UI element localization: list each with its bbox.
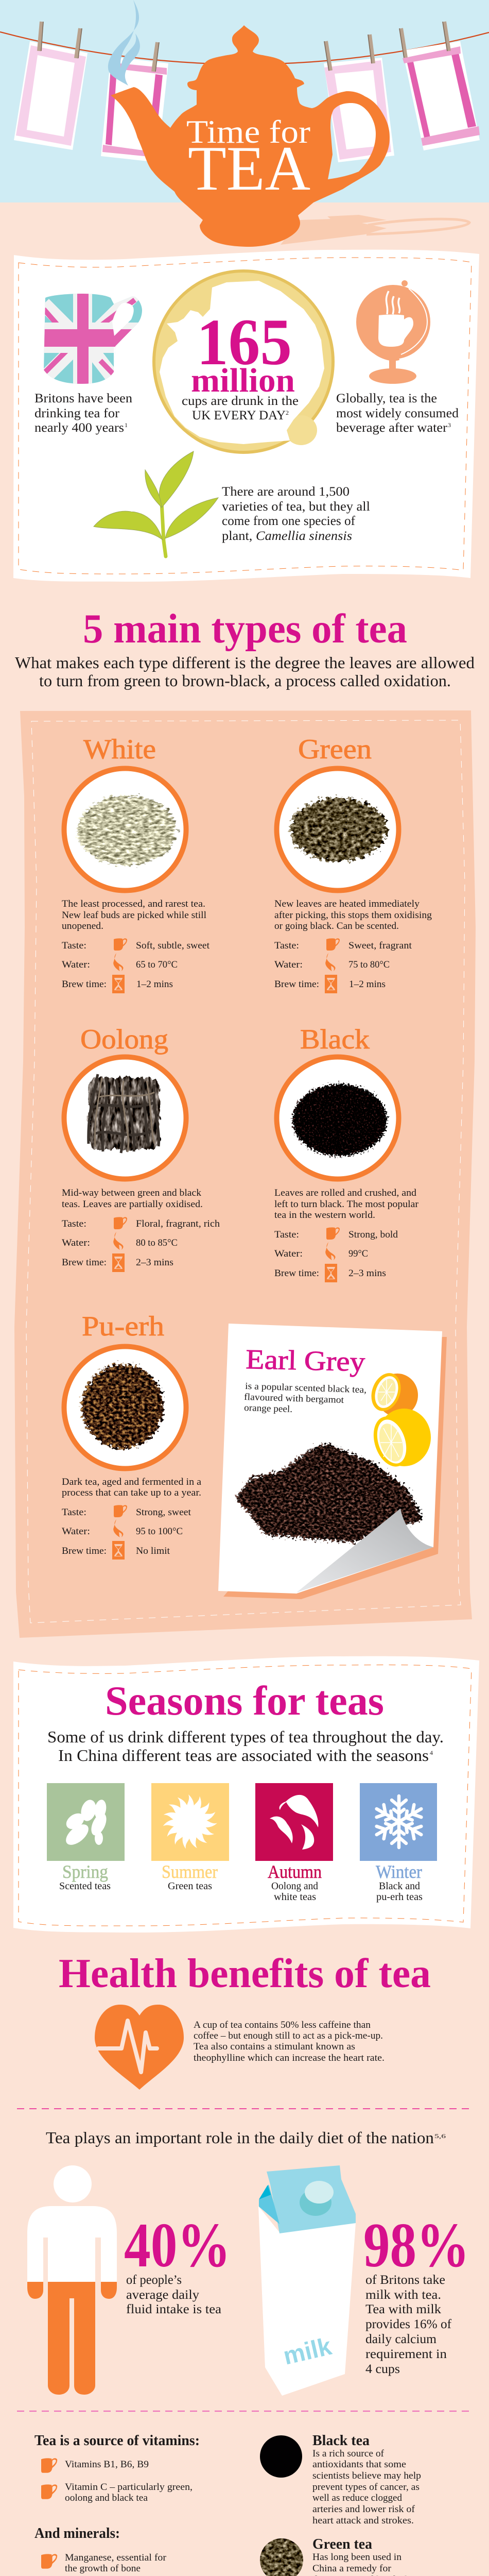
vitamin item 1 <box>41 2458 149 2473</box>
washing line <box>0 32 489 64</box>
teapot <box>111 25 390 247</box>
description: tea in the western world. <box>274 1210 375 1221</box>
tea stain ring <box>154 271 333 452</box>
text: varieties: varieties of tea, but they all <box>222 500 370 514</box>
text: global <box>336 392 459 435</box>
benefit: black tea: Is a rich source of <box>312 2449 385 2459</box>
facts: Brew time: <box>62 1258 107 1268</box>
intro text <box>47 1727 444 1765</box>
facts: Taste: <box>62 1219 86 1229</box>
heading: Earl Grey <box>246 1344 365 1377</box>
text: global: 3 <box>448 421 451 429</box>
stat: 98%: of Britons take <box>365 2273 445 2287</box>
facts: 1–2 mins <box>349 979 386 990</box>
text: daily diet: Tea plays an important role in the daily diet of the nation <box>46 2128 434 2147</box>
benefit: black tea: heart attack and strokes. <box>312 2516 414 2526</box>
facts: Brew time: <box>62 979 107 990</box>
icon: falling leaves <box>270 1795 318 1850</box>
facts: Strong, bold <box>348 1230 398 1240</box>
stat: 98%: daily calcium <box>365 2332 437 2346</box>
stat: 98%: 98% <box>363 2210 469 2280</box>
benefit: black tea: arteries and lower risk of <box>312 2504 415 2515</box>
tea photo: black <box>277 1057 398 1179</box>
season: spring: Spring <box>62 1861 108 1882</box>
heading: 5 main types: 5 main types of tea <box>83 606 407 652</box>
text: varieties: come from one species of <box>222 514 356 528</box>
heading: health benefits: Health benefits of tea <box>59 1951 431 1996</box>
benefit: green tea: Has long been used in <box>312 2552 401 2563</box>
teapot shadow <box>281 215 469 245</box>
mineral item 1: the growth of bone <box>65 2564 141 2574</box>
intro text: Some of us drink different types of tea throughout the day. <box>47 1727 444 1746</box>
facts: Water: <box>274 960 303 970</box>
description: or going black. Can be scented. <box>274 921 399 931</box>
text: varieties: plant, Camellia sinensis <box>222 529 352 543</box>
facts <box>62 1505 191 1560</box>
description <box>62 899 206 931</box>
season: spring <box>47 1783 125 1892</box>
stat: 98%: requirement in <box>365 2347 447 2361</box>
paper <box>13 250 479 582</box>
stat: 165 million: million <box>191 362 295 399</box>
facts: Taste: <box>274 941 299 951</box>
card: white tea: White <box>83 734 156 765</box>
icon: globe with cup <box>356 280 430 384</box>
facts: Strong, sweet <box>136 1507 191 1518</box>
description: Leaves are rolled and crushed, and <box>274 1188 417 1198</box>
text: history: 1 <box>125 421 128 429</box>
text: global: most widely consumed <box>336 406 459 420</box>
stat: 165 million <box>182 306 299 422</box>
stat: 40% <box>124 2210 231 2316</box>
tea photo: green <box>277 769 398 890</box>
list: minerals: And minerals: <box>34 2526 120 2541</box>
header scene <box>0 0 489 247</box>
description <box>274 1188 418 1221</box>
facts: Water: <box>62 960 90 970</box>
card: pu-erh tea: Pu-erh <box>82 1311 164 1342</box>
list: vitamins: Tea is a source of vitamins: <box>34 2433 200 2449</box>
season: winter: Black and <box>379 1880 420 1892</box>
card: green tea <box>274 734 432 993</box>
description: New leaf buds are picked while still <box>62 910 206 921</box>
season: autumn: white teas <box>274 1891 316 1903</box>
panel: tea types <box>14 710 476 1638</box>
description: left to turn black. The most popular <box>274 1199 418 1210</box>
stat: 98%: 4 cups <box>365 2362 400 2376</box>
benefit: green tea: Green tea <box>312 2536 372 2552</box>
description <box>62 1477 201 1498</box>
list: minerals <box>34 2526 189 2576</box>
facts <box>274 1227 398 1282</box>
benefit: black tea: prevent types of cancer, as <box>312 2482 420 2493</box>
text: history: drinking tea for <box>34 406 120 420</box>
benefit: green tea <box>260 2538 407 2576</box>
heading: 5 main types <box>15 606 475 690</box>
facts: Water: <box>62 1527 90 1537</box>
heading: 5 main types: to turn from green to brown-black, a process called oxidation. <box>39 671 451 690</box>
steam <box>108 0 140 86</box>
card: oolong tea: Oolong <box>80 1024 168 1055</box>
season: summer: Summer <box>162 1861 218 1882</box>
text: daily diet: 5,6 <box>434 2132 446 2140</box>
text: history: Britons have been <box>34 392 133 405</box>
vitamin item 1: Vitamins B1, B6, B9 <box>65 2460 149 2470</box>
clothes pegs <box>39 22 449 72</box>
card: black tea: Black <box>300 1024 370 1055</box>
vitamin item 2: oolong and black tea <box>65 2493 148 2503</box>
stat: 40%: of people’s <box>126 2273 182 2287</box>
facts: Sweet, fragrant <box>348 941 412 951</box>
season: winter <box>360 1783 437 1903</box>
mineral item 1 <box>41 2553 166 2574</box>
stat: 98% <box>363 2210 469 2376</box>
season: winter: pu-erh teas <box>376 1891 423 1903</box>
benefit: black tea: well as reduce clogged <box>312 2493 403 2503</box>
text: caffeine: theophylline which can increase the heart rate. <box>194 2053 385 2063</box>
icon: sun <box>162 1794 217 1849</box>
title: Time for <box>186 113 310 150</box>
heading: 5 main types: What makes each type different is the degree the leaves are allowed <box>15 653 475 672</box>
facts <box>274 938 412 993</box>
season: autumn: Autumn <box>268 1861 322 1882</box>
facts: 1–2 mins <box>136 979 173 990</box>
tea photo: white <box>64 769 186 890</box>
intro text: In China different teas are associated with the seasons <box>58 1746 429 1765</box>
facts: 75 to 80°C <box>348 960 390 970</box>
description <box>244 1381 366 1415</box>
text: caffeine: A cup of tea contains 50% less caffeine than <box>194 2020 371 2030</box>
facts: Floral, fragrant, rich <box>136 1219 220 1229</box>
stat: 98%: Tea with milk <box>365 2302 442 2316</box>
icon: snowflake <box>373 1796 425 1848</box>
benefit: green tea: China a remedy for <box>312 2564 391 2574</box>
facts: 95 to 100°C <box>136 1527 183 1537</box>
description: The least processed, and rarest tea. <box>62 899 205 909</box>
icon: flower <box>62 1798 110 1849</box>
vitamin item 2 <box>41 2482 193 2503</box>
benefit: black tea <box>260 2433 421 2526</box>
description: unopened. <box>62 921 103 931</box>
card: white tea <box>62 734 210 993</box>
description: Mid-way between green and black <box>62 1188 202 1198</box>
stat: 40%: 40% <box>124 2210 231 2280</box>
stat: 40%: fluid intake is tea <box>126 2302 221 2316</box>
description <box>62 1188 203 1210</box>
stat: 98%: provides 16% of <box>365 2317 452 2331</box>
season: autumn <box>255 1783 333 1903</box>
facts: 2–3 mins <box>136 1258 173 1268</box>
card: green tea: Green <box>298 734 372 765</box>
facts: Taste: <box>62 1507 86 1518</box>
icon: milk carton: milk <box>281 2333 334 2370</box>
stat: 165 million: UK EVERY DAY <box>192 409 286 422</box>
facts: Soft, subtle, sweet <box>136 941 210 951</box>
benefit: black tea: Black tea <box>312 2433 370 2449</box>
facts: Taste: <box>62 941 86 951</box>
text: global: beverage after water <box>336 421 448 435</box>
facts: Water: <box>62 1238 90 1248</box>
facts <box>62 1217 220 1272</box>
tea photo: pu-erh <box>64 1347 186 1468</box>
tea towel 3 <box>324 58 394 162</box>
panel: seasons <box>13 1656 479 1933</box>
icon: union jack mug <box>44 294 142 384</box>
facts: Water: <box>274 1249 303 1259</box>
stat: 40%: average daily <box>126 2288 200 2302</box>
description: orange peel. <box>244 1403 292 1415</box>
season: summer <box>151 1783 229 1892</box>
benefit: black tea: antioxidants that some <box>312 2460 406 2470</box>
text: caffeine: coffee – but enough still to act as a pick-me-up. <box>194 2031 383 2041</box>
icon: milk carton <box>258 2165 356 2396</box>
sky <box>0 0 489 202</box>
description: is a popular scented black tea, <box>245 1381 366 1395</box>
tea towel 2 <box>101 57 168 162</box>
page shadow <box>223 1337 447 1599</box>
description: flavoured with bergamot <box>244 1392 344 1405</box>
icon: heart with pulse <box>95 2005 184 2090</box>
season: spring: Scented teas <box>59 1880 111 1892</box>
mineral item 1: Manganese, essential for <box>65 2553 166 2563</box>
text: history: nearly 400 years <box>34 421 124 435</box>
text: caffeine: Tea also contains a stimulant known as <box>194 2042 355 2052</box>
facts: No limit <box>136 1546 170 1556</box>
icon: tea plant <box>94 451 218 556</box>
card: pu-erh tea <box>62 1311 201 1560</box>
list: vitamins <box>34 2433 200 2503</box>
description: teas. Leaves are partially oxidised. <box>62 1199 203 1210</box>
card: oolong tea <box>62 1024 220 1272</box>
card: black tea <box>274 1024 418 1282</box>
facts: Taste: <box>274 1230 299 1240</box>
description: Dark tea, aged and fermented in a <box>62 1477 201 1487</box>
tea photo: oolong <box>64 1057 186 1179</box>
description <box>274 899 432 931</box>
season: summer: Green teas <box>168 1880 212 1892</box>
description: after picking, this stops them oxidising <box>274 910 432 921</box>
stat: 165 million: cups are drunk in the <box>182 394 299 408</box>
orange half <box>366 1369 418 1417</box>
description: process that can take up to a year. <box>62 1488 201 1498</box>
facts <box>62 938 210 993</box>
lemon half <box>368 1409 431 1471</box>
page curl <box>296 1509 433 1592</box>
title: TEA <box>188 133 310 204</box>
description: New leaves are heated immediately <box>274 899 420 909</box>
text: history <box>34 392 133 435</box>
icon: person 40% <box>27 2165 117 2395</box>
facts: Brew time: <box>274 979 319 990</box>
stat: 165 million: 2 <box>286 409 289 416</box>
text: varieties: There are around 1,500 <box>222 485 350 499</box>
facts: 65 to 70°C <box>136 960 178 970</box>
stat: 165 million: 165 <box>197 306 292 379</box>
heading: Seasons for teas <box>105 1679 384 1724</box>
vitamin item 2: Vitamin C – particularly green, <box>65 2482 193 2493</box>
facts: 99°C <box>348 1249 368 1259</box>
text: global: Globally, tea is the <box>336 392 437 405</box>
text: varieties <box>222 485 370 543</box>
page <box>218 1324 442 1594</box>
facts: 2–3 mins <box>348 1268 386 1279</box>
earl grey heap <box>236 1444 422 1543</box>
facts: Brew time: <box>62 1546 107 1556</box>
season: winter: Winter <box>376 1861 422 1882</box>
tea towel 4 <box>403 41 480 150</box>
season: autumn: Oolong and <box>271 1880 318 1892</box>
benefit: black tea: scientists believe may help <box>312 2471 421 2481</box>
card: earl grey <box>218 1324 447 1599</box>
stat: 98%: milk with tea. <box>365 2288 441 2302</box>
tea towel 1 <box>14 41 88 150</box>
facts: Brew time: <box>274 1268 319 1279</box>
text: caffeine <box>194 2020 385 2063</box>
facts: 80 to 85°C <box>136 1238 178 1248</box>
panel: intro facts <box>13 250 479 582</box>
intro text: 4 <box>430 1749 433 1756</box>
